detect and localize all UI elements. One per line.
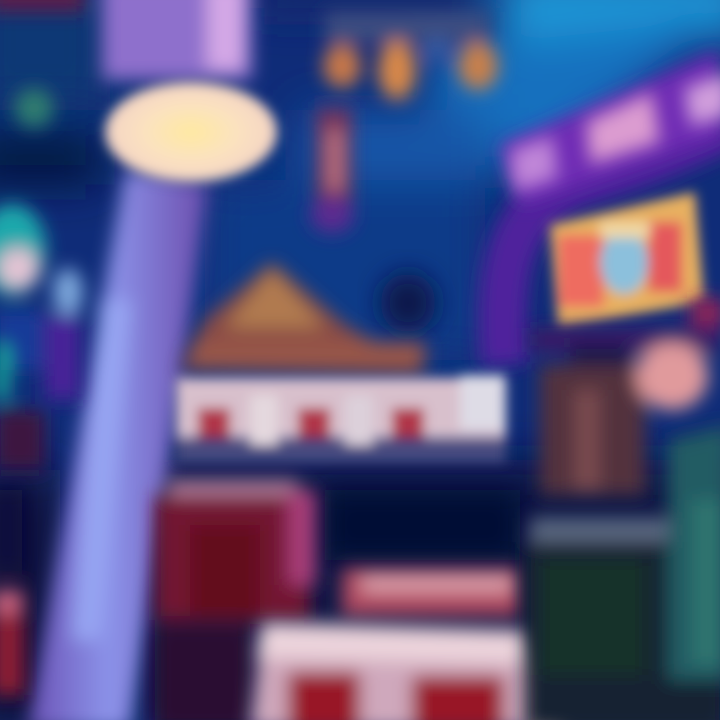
glowing lamp xyxy=(105,82,277,182)
arch pink panels xyxy=(510,72,720,192)
arcade cabinet and figure xyxy=(530,298,720,495)
dark wall spot xyxy=(380,273,436,333)
red chair xyxy=(155,480,316,720)
left red seat xyxy=(0,490,24,695)
left neon figure xyxy=(0,204,83,470)
hanging tassel xyxy=(310,108,354,233)
purple arcade arch xyxy=(500,50,720,365)
tent roof xyxy=(180,262,430,375)
green plant xyxy=(525,425,720,720)
dark counter xyxy=(325,490,520,560)
arcade screen xyxy=(550,192,704,328)
striped table xyxy=(250,622,565,720)
hanging lights xyxy=(323,12,498,100)
red and white table top xyxy=(342,568,520,616)
lavender column xyxy=(28,170,208,720)
upper drape xyxy=(0,0,252,80)
striped carousel band xyxy=(176,375,506,462)
green wall light xyxy=(14,88,54,128)
